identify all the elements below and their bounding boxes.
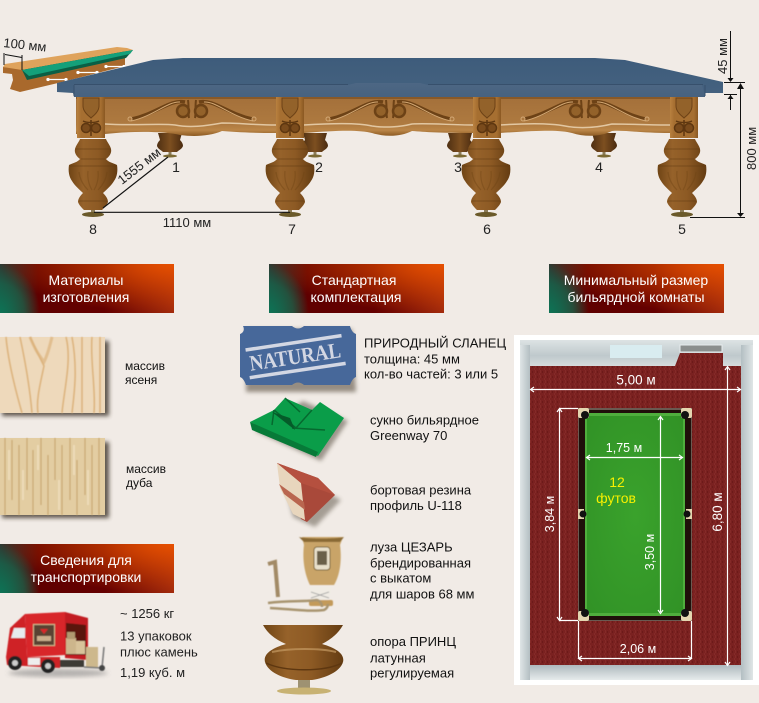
- pocket text: для шаров 68 мм: [370, 586, 474, 602]
- swatch: oak: [0, 438, 109, 518]
- room dimension labels: 5,00 м: [616, 372, 656, 388]
- dimension: 45 mm: 45 мм: [715, 38, 730, 74]
- pocket text: с выкатом: [370, 570, 431, 586]
- pocket text: брендированная: [370, 556, 471, 570]
- label: oak: дуба: [126, 476, 153, 490]
- carpet floor: [530, 353, 741, 665]
- label: oak: [126, 462, 166, 490]
- leg support text: латунная: [370, 650, 426, 666]
- room dimension lines: [530, 366, 740, 666]
- leg support text: опора ПРИНЦ: [370, 634, 456, 649]
- cloth text: сукно бильярдное: [370, 412, 479, 428]
- icon: pocket: [268, 537, 344, 611]
- leg numbers: [89, 159, 686, 237]
- transport facts: ~ 1256 кг: [120, 606, 174, 621]
- rail cross-section with cloth: [3, 47, 133, 92]
- leg numbers: 7: [288, 221, 296, 237]
- icon: natural slate: [240, 326, 356, 392]
- icon: natural slate: NATURAL: [248, 337, 342, 376]
- label: ash: массив: [125, 359, 165, 373]
- dimension: 1555 mm: [103, 144, 168, 208]
- billiard table: [578, 408, 692, 621]
- heading: transport: транспортировки: [31, 569, 141, 585]
- heading: materials: изготовления: [43, 289, 129, 305]
- leg numbers: 2: [315, 159, 323, 175]
- panel: room plan: [514, 335, 759, 685]
- heading: standard set: Стандартная: [312, 272, 396, 288]
- rubber text: [370, 482, 472, 513]
- slate text: кол-во частей: 3 или 5: [364, 366, 498, 382]
- leg support text: регулируемая: [370, 666, 454, 680]
- icon: cushion rubber: [277, 463, 341, 527]
- rubber text: бортовая резина: [370, 482, 472, 498]
- leg numbers: 8: [89, 221, 97, 237]
- room dimension labels: 1,75 м: [606, 441, 642, 455]
- dimension: 1110 mm: 1110 мм: [163, 215, 211, 230]
- heading: minimal room size: бильярдной комнаты: [567, 289, 705, 305]
- leg numbers: 5: [678, 221, 686, 237]
- width arrows on the rail: [47, 66, 125, 80]
- dimension: 45 mm: [715, 31, 745, 110]
- label: ash: [125, 359, 165, 387]
- table top slate: [57, 58, 723, 97]
- leg numbers: 4: [595, 159, 603, 175]
- slate text: ПРИРОДНЫЙ СЛАНЕЦ: [364, 336, 506, 350]
- room dimension labels: 3,84 м: [543, 496, 557, 532]
- pocket text: [370, 540, 474, 602]
- room dimension labels: 3,50 м: [643, 534, 657, 570]
- leg numbers: 3: [454, 159, 462, 175]
- dimension: 100 mm: [3, 35, 47, 70]
- transport facts: 1,19 куб. м: [120, 665, 185, 680]
- front legs: [69, 139, 706, 217]
- room dimension labels: [543, 372, 725, 656]
- room dimension labels: 2,06 м: [620, 642, 656, 656]
- leg numbers: 1: [172, 159, 180, 175]
- cloth text: [370, 412, 479, 443]
- icon: delivery truck: [6, 612, 108, 677]
- room dimension labels: 6,80 м: [710, 492, 725, 532]
- leg support text: [370, 634, 456, 680]
- swatch: ash: [0, 337, 109, 416]
- heading: materials: [0, 264, 174, 313]
- cloth text: Greenway 70: [370, 428, 447, 443]
- heading: standard set: комплектация: [311, 289, 401, 305]
- rubber text: профиль U-118: [370, 498, 462, 513]
- slate text: толщина: 45 мм: [364, 352, 460, 366]
- dimension: 800 mm: [690, 83, 759, 218]
- heading: minimal room size: [549, 264, 724, 313]
- table size label: [596, 474, 636, 506]
- leg numbers: 6: [483, 221, 491, 237]
- dimension: 800 mm: 800 мм: [744, 127, 759, 170]
- pocket text: луза ЦЕЗАРЬ: [370, 540, 453, 554]
- table size label: футов: [596, 490, 636, 506]
- transport facts: [120, 606, 198, 680]
- heading: standard set: [269, 264, 444, 313]
- heading: transport: [0, 544, 174, 593]
- room walls: [520, 340, 753, 680]
- slate text: [364, 336, 506, 382]
- transport facts: плюс камень: [120, 644, 198, 660]
- back legs: [157, 133, 617, 158]
- icon: adjustable leg: [263, 625, 343, 694]
- label: oak: массив: [126, 462, 166, 476]
- transport facts: 13 упаковок: [120, 628, 192, 644]
- dimension: 100 mm: 100 мм: [3, 35, 47, 55]
- heading: materials: Материалы: [49, 272, 123, 288]
- table apron with carvings: [76, 97, 698, 138]
- heading: transport: Сведения для: [40, 552, 132, 568]
- window: [610, 345, 662, 358]
- heading: minimal room size: Минимальный размер: [564, 272, 708, 288]
- door recess: [680, 345, 722, 352]
- icon: billiard cloth: [250, 398, 348, 461]
- table size label: 12: [609, 474, 625, 490]
- label: ash: ясеня: [125, 373, 157, 387]
- dimension: 1555 mm: 1555 мм: [115, 144, 164, 187]
